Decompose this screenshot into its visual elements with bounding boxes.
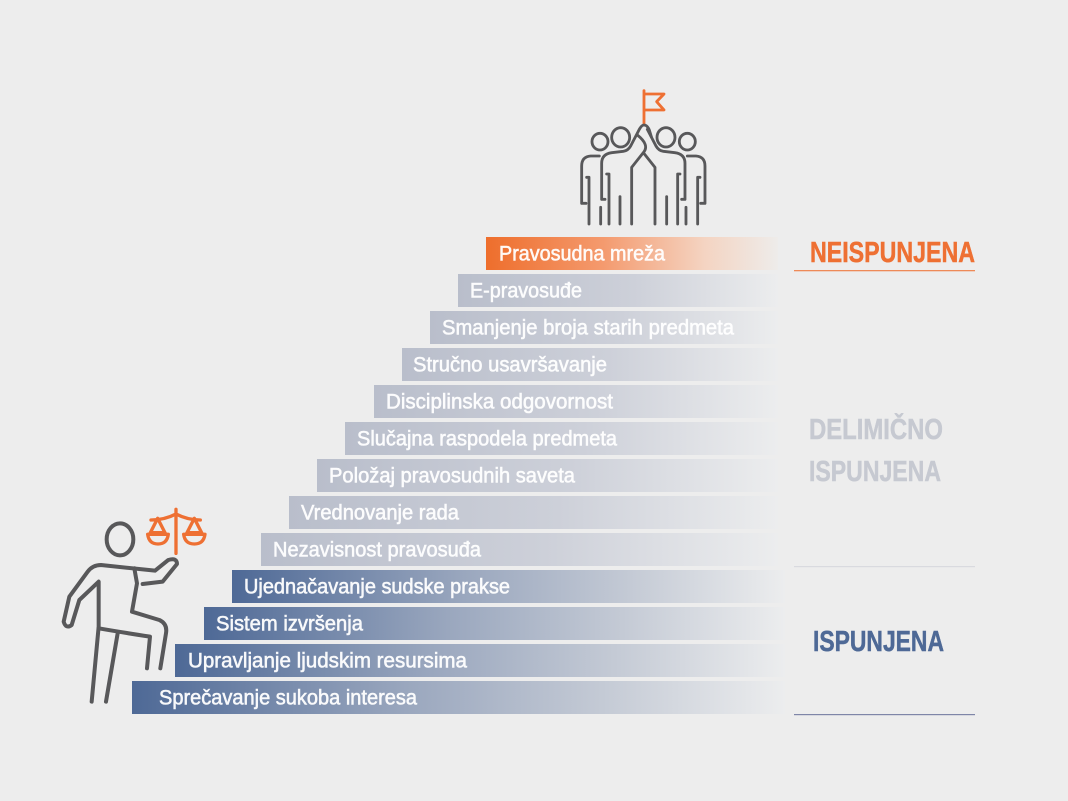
bar: Stručno usavršavanje: Stručno usavršavanje	[413, 354, 607, 376]
bar: Sprečavanje sukoba interesa: Sprečavanje sukoba interesa	[159, 686, 417, 710]
bar: Vrednovanje rada: Vrednovanje rada	[301, 502, 459, 524]
bar: Pravosudna mreža: Pravosudna mreža	[499, 242, 665, 266]
bar: Disciplinska odgovornost	[374, 385, 778, 418]
bar: E-pravosuđe	[458, 274, 778, 307]
divider	[794, 714, 975, 715]
label: NEISPUNJENA: NEISPUNJENA	[810, 237, 975, 269]
bar: Slučajna raspodela predmeta: Slučajna raspodela predmeta	[357, 428, 617, 450]
team figures	[582, 125, 705, 224]
icon: climbing figure with scales	[64, 509, 205, 702]
bar: Sprečavanje sukoba interesa	[132, 681, 785, 714]
bar: Sistem izvršenja	[204, 607, 785, 640]
bar: Vrednovanje rada	[289, 496, 778, 529]
bar: Smanjenje broja starih predmeta: Smanjenje broja starih predmeta	[442, 316, 734, 340]
icon: orange scales	[148, 509, 205, 553]
bar: Ujednačavanje sudske prakse: Ujednačavanje sudske prakse	[244, 576, 510, 598]
label: ISPUNJENA: ISPUNJENA	[813, 626, 944, 658]
bar: Ujednačavanje sudske prakse	[232, 570, 785, 603]
bar: Nezavisnost pravosuđa: Nezavisnost pravosuđa	[273, 538, 481, 562]
bar: Smanjenje broja starih predmeta	[430, 311, 778, 344]
divider	[794, 566, 975, 567]
bar: Stručno usavršavanje	[402, 348, 778, 381]
staircase bars	[132, 237, 785, 714]
label: DELIMIČNO ISPUNJENA: ISPUNJENA	[809, 456, 941, 488]
bar: Sistem izvršenja: Sistem izvršenja	[216, 612, 363, 636]
bar: Slučajna raspodela predmeta	[345, 422, 778, 455]
bar: Nezavisnost pravosuđa	[261, 533, 778, 566]
bar: Upravljanje ljudskim resursima: Upravljanje ljudskim resursima	[188, 650, 467, 672]
bar: E-pravosuđe: E-pravosuđe	[470, 280, 582, 302]
label: DELIMIČNO ISPUNJENA: DELIMIČNO	[809, 412, 943, 446]
bar: Pravosudna mreža	[486, 237, 778, 270]
bar: Položaj pravosudnih saveta	[317, 459, 778, 492]
icon: orange flag	[644, 91, 664, 123]
bar: Upravljanje ljudskim resursima	[175, 644, 785, 677]
bar: Položaj pravosudnih saveta: Položaj pravosudnih saveta	[329, 464, 575, 488]
icon: team with flag	[582, 91, 705, 224]
climbing figure	[64, 523, 177, 702]
label: DELIMIČNO ISPUNJENA	[809, 412, 943, 488]
bar: Disciplinska odgovornost: Disciplinska odgovornost	[386, 390, 613, 414]
